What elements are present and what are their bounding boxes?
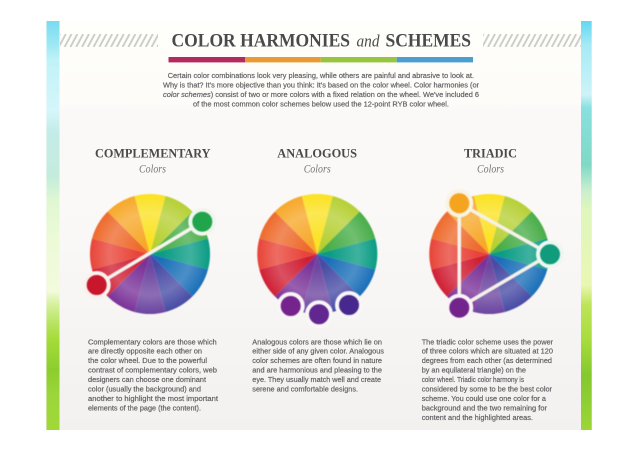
triangle connector bbox=[459, 203, 550, 308]
intro paragraph: Certain color combinations look very pleasing, while others are painful and abrasive to look at. bbox=[168, 71, 474, 80]
complementary description bbox=[88, 337, 219, 413]
complementary description: the color wheel. Due to the powerful bbox=[88, 356, 207, 365]
teal dot bbox=[538, 242, 562, 266]
red dot bbox=[85, 273, 109, 297]
heading: triadic: TRIADIC bbox=[464, 145, 517, 160]
right hatch decoration bbox=[483, 34, 581, 47]
title: COLOR HARMONIES bbox=[172, 31, 350, 52]
triadic description: background and the two remaining for bbox=[422, 404, 547, 413]
heading: complementary bbox=[95, 145, 211, 176]
title: SCHEMES bbox=[386, 31, 471, 52]
triadic description bbox=[422, 337, 553, 422]
heading: analogous: Colors bbox=[304, 164, 331, 176]
heading: complementary: Colors bbox=[139, 164, 166, 176]
analogous description bbox=[252, 337, 384, 394]
complementary description: Complementary colors are those which bbox=[88, 337, 217, 346]
triadic description: The triadic color scheme uses the power bbox=[422, 337, 553, 346]
analogous description: either side of any given color. Analogous bbox=[252, 347, 384, 356]
intro paragraph: of the most common color schemes below used the 12-point RYB color wheel. bbox=[193, 100, 449, 109]
heading: triadic bbox=[464, 145, 517, 176]
intro paragraph bbox=[163, 71, 479, 109]
analogous description: color schemes are often found in nature bbox=[252, 356, 382, 365]
complementary description: designers can choose one dominant bbox=[88, 375, 207, 384]
heading: complementary: COMPLEMENTARY bbox=[95, 145, 211, 160]
analogous wheel bbox=[257, 194, 377, 326]
triadic description: scheme. You could use one color for a bbox=[422, 394, 547, 403]
triadic description: degrees from each other (as determined bbox=[422, 356, 552, 365]
complementary description: another to highlight the most important bbox=[88, 394, 219, 403]
indigo dot right bbox=[337, 293, 361, 317]
heading: analogous: ANALOGOUS bbox=[277, 145, 357, 160]
rainbow title bar bbox=[168, 57, 473, 62]
complementary description: are directly opposite each other on bbox=[88, 347, 202, 356]
heading: analogous bbox=[277, 145, 357, 176]
green dot bbox=[190, 210, 214, 234]
analogous description: serene and comfortable designs. bbox=[252, 385, 358, 394]
violet dot center bbox=[307, 302, 331, 326]
triadic description: color wheel. Triadic color harmony is bbox=[422, 375, 524, 384]
triadic description: considered by some to be the best color bbox=[422, 385, 552, 394]
connector line bbox=[97, 222, 202, 285]
right gradient strip bbox=[581, 21, 592, 430]
analogous description: and are harmonious and pleasing to the bbox=[252, 366, 382, 375]
analogous description: Analogous colors are those which lie on bbox=[252, 337, 382, 346]
left gradient strip bbox=[46, 21, 60, 430]
left hatch decoration bbox=[60, 34, 158, 47]
complementary description: color (usually the background) and bbox=[88, 385, 201, 394]
purple dot bbox=[447, 296, 471, 320]
triadic wheel bbox=[429, 191, 562, 320]
triadic description: of three colors which are situated at 120 bbox=[422, 347, 553, 356]
complementary wheel bbox=[85, 194, 214, 314]
triadic description: by an equilateral triangle) on the bbox=[422, 366, 526, 375]
analogous description: eye. They usually match well and create bbox=[252, 375, 381, 384]
orange dot bbox=[447, 191, 471, 215]
triadic description: content and the highlighted areas. bbox=[422, 413, 533, 422]
title bbox=[172, 31, 471, 52]
heading: triadic: Colors bbox=[477, 164, 504, 176]
purple dot left bbox=[279, 294, 303, 318]
complementary description: elements of the page (the content). bbox=[88, 404, 201, 413]
intro paragraph: Why is that? It's more objective than you think: It's based on the color wheel. Color harmonies (or bbox=[163, 81, 479, 90]
intro paragraph: color schemes) consist of two or more colors with a fixed relation on the wheel. We've included 6 bbox=[163, 90, 479, 99]
complementary description: contrast of complementary colors, web bbox=[88, 366, 217, 375]
page panel background bbox=[46, 21, 592, 430]
title: and bbox=[356, 32, 380, 51]
